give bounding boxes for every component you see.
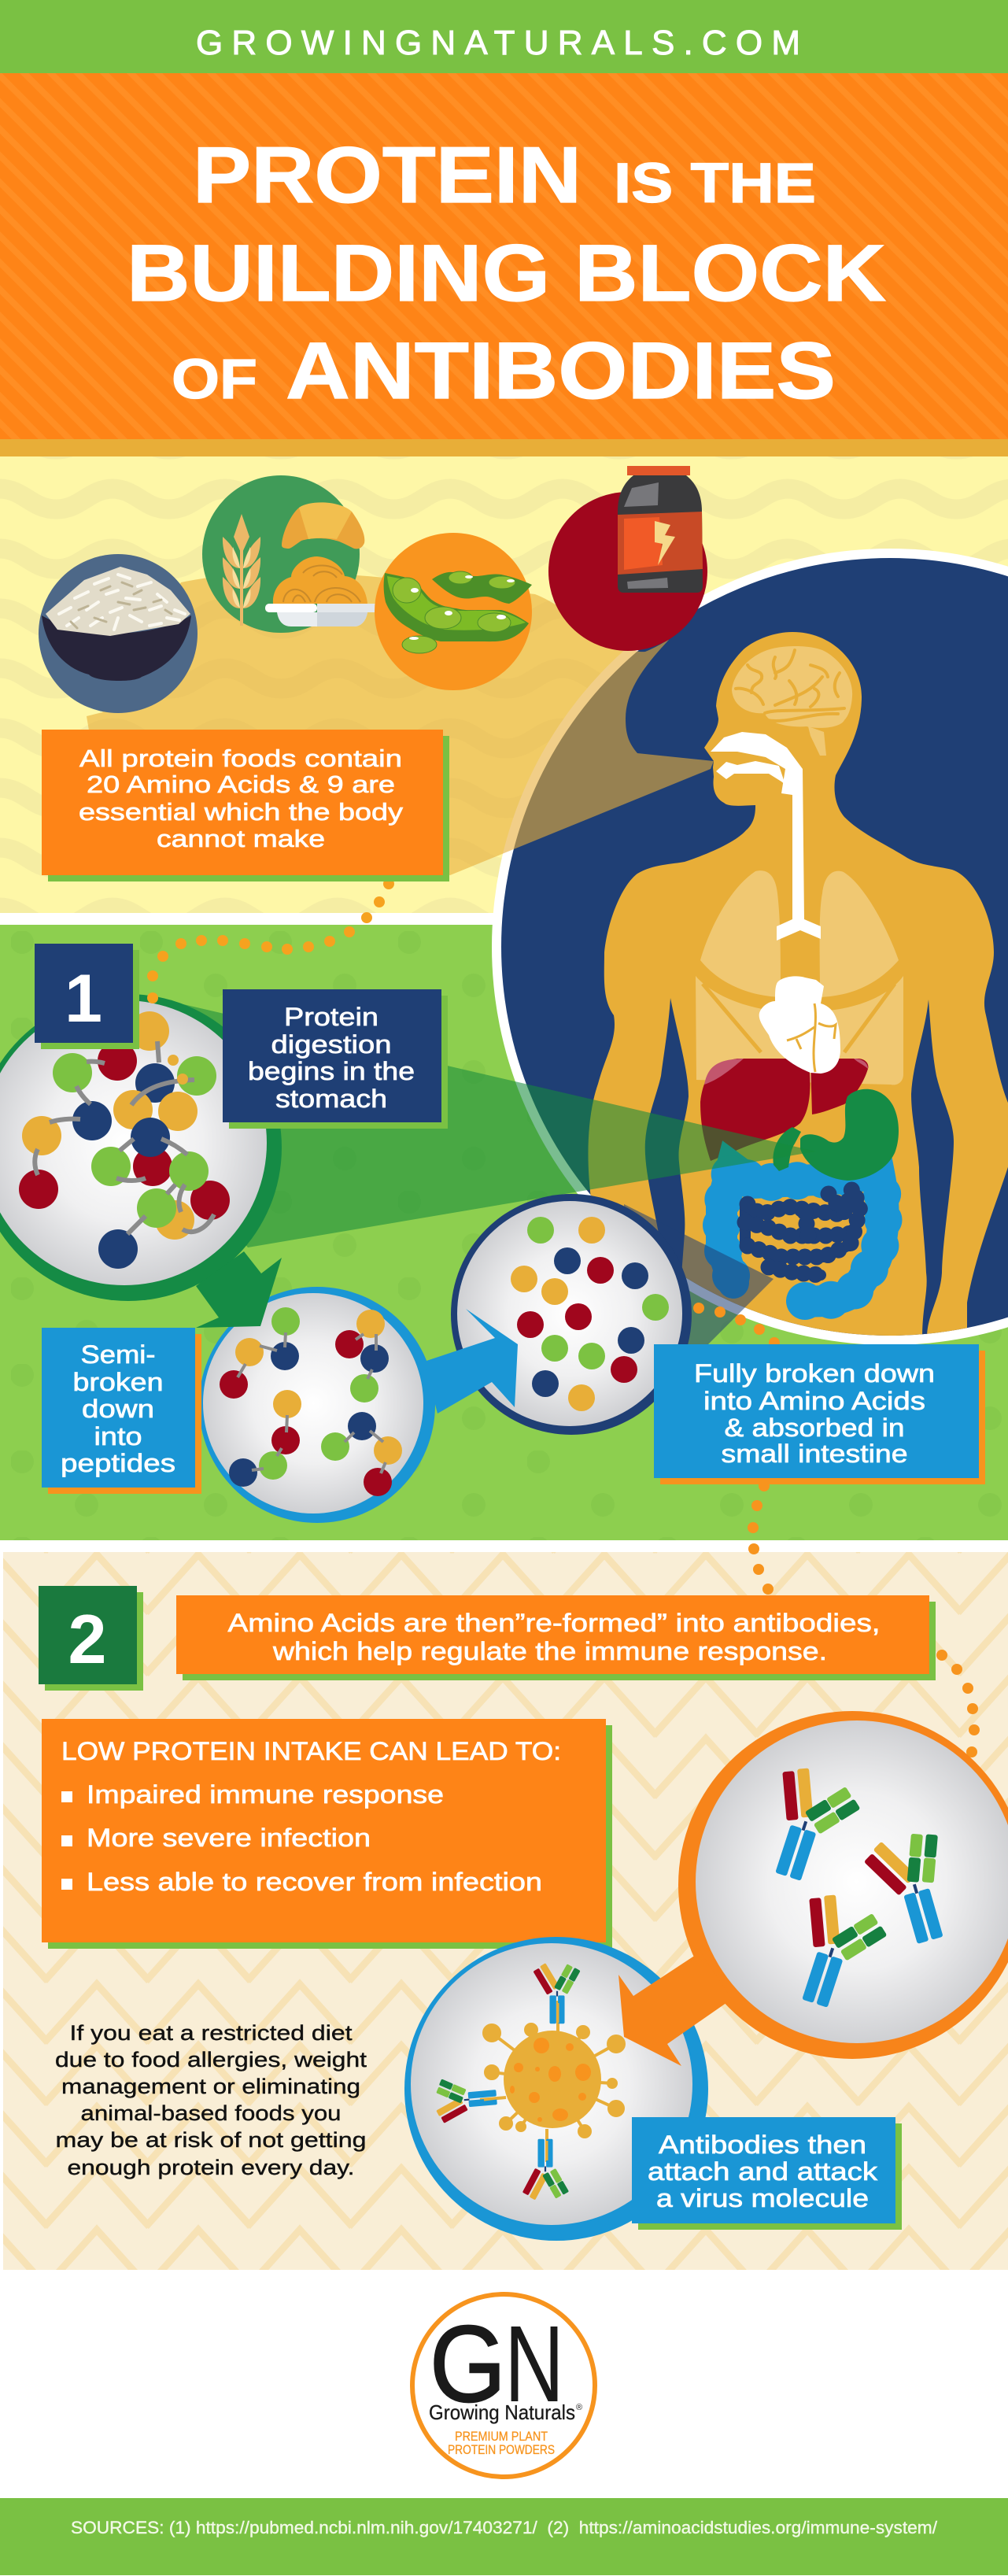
callout: semi-broken down: peptides <box>61 1449 175 1477</box>
section background: antibody panel <box>3 1552 1008 2270</box>
liver <box>700 1059 868 1161</box>
text: restricted diet note: due to food allergies, weight <box>55 2048 367 2072</box>
absorption beam: intestine to circle <box>622 1204 774 1344</box>
callout: antibodies attack <box>632 2117 902 2230</box>
callout: protein digestion: begins in the <box>248 1057 415 1085</box>
virus <box>484 2024 624 2137</box>
callout: fully broken down <box>654 1344 985 1484</box>
blue gaps between arms and torso <box>630 998 954 1338</box>
section background: digestion panel <box>0 925 1008 1540</box>
callout: protein foods: All protein foods contain <box>79 745 402 772</box>
website banner <box>0 0 1008 73</box>
attached antibodies <box>434 1963 581 2200</box>
callout: protein foods <box>42 730 449 881</box>
text: restricted diet note: management or eliminating <box>61 2075 360 2098</box>
callout: semi-broken down <box>42 1328 201 1494</box>
logo: Growing Naturals <box>412 2294 595 2477</box>
callout: protein foods: 20 Amino Acids & 9 are <box>87 771 395 798</box>
step number 1: 1 <box>65 961 102 1037</box>
brain <box>732 646 852 756</box>
food icon: rice bowl <box>39 554 198 713</box>
callout: antibodies attack: a virus molecule <box>656 2184 869 2212</box>
title panel: ANTIBODIES <box>286 326 836 416</box>
logo: Growing Naturals: G <box>430 2304 506 2425</box>
callout: semi-broken down: Semi- <box>80 1340 156 1369</box>
logo: Growing Naturals: PREMIUM PLANT <box>455 2429 548 2444</box>
callout: fully broken down: & absorbed in <box>724 1414 905 1442</box>
dotted path: intestine to antibodies <box>693 1303 980 1757</box>
title panel: PROTEIN <box>193 131 582 220</box>
logo: Growing Naturals: N <box>504 2304 564 2425</box>
circle: antibodies <box>678 1711 1008 2059</box>
callout: amino acids re-formed: which help regulate the immune response. <box>272 1637 827 1665</box>
small intestine <box>745 1188 860 1275</box>
callout: semi-broken down: into <box>94 1422 142 1451</box>
arrow: peptides to amino acids <box>424 1309 518 1414</box>
step number 2: 2 <box>68 1600 106 1678</box>
logo: Growing Naturals: Growing Naturals <box>429 2400 575 2424</box>
step number 2 <box>39 1586 143 1691</box>
heart <box>759 976 840 1074</box>
circle: peptides <box>199 1287 435 1523</box>
colon <box>722 1167 884 1301</box>
circle: amino acids <box>451 1194 692 1435</box>
panel: low protein intake: Impaired immune response <box>87 1780 444 1809</box>
text: restricted diet note: enough protein every day. <box>68 2156 354 2179</box>
arrow: whole protein to peptides <box>196 1251 282 1328</box>
lungs <box>696 870 903 1085</box>
footer band <box>0 2498 1008 2575</box>
food icon: grains and bread <box>202 475 376 633</box>
panel: low protein intake: Less able to recover from infection <box>87 1868 542 1896</box>
logo: Growing Naturals: ® <box>576 2403 582 2412</box>
callout: antibodies attack: attach and attack <box>648 2157 878 2186</box>
logo: Growing Naturals: PROTEIN POWDERS <box>448 2442 555 2457</box>
callout: antibodies attack: Antibodies then <box>659 2131 866 2159</box>
callout: protein digestion: Protein <box>284 1003 378 1031</box>
human body with organs <box>588 632 1008 1354</box>
title panel <box>0 73 1008 456</box>
callout: fully broken down: small intestine <box>721 1440 908 1468</box>
website banner: GROWINGNATURALS.COM <box>196 24 800 62</box>
callout: fully broken down: into Amino Acids <box>703 1387 925 1415</box>
circle: virus attacked by antibodies <box>404 1937 708 2241</box>
step number 1 <box>35 944 139 1049</box>
panel: low protein intake <box>42 1719 612 1949</box>
title panel: BUILDING BLOCK <box>127 228 886 318</box>
body silhouette <box>588 632 1008 1354</box>
callout: fully broken down: Fully broken down <box>694 1359 935 1388</box>
text: restricted diet note: may be at risk of not getting <box>55 2128 367 2152</box>
text: restricted diet note: If you eat a restricted diet <box>69 2021 353 2045</box>
panel: low protein intake: LOW PROTEIN INTAKE CAN LEAD TO: <box>61 1737 561 1765</box>
stomach and pancreas <box>773 1089 899 1181</box>
callout: semi-broken down: broken <box>72 1368 164 1396</box>
antibody group <box>751 1761 966 2018</box>
callout: semi-broken down: down <box>82 1395 154 1423</box>
dotted path: food box to step one <box>147 878 394 981</box>
text: restricted diet note <box>55 2021 367 2179</box>
callout: protein foods: essential which the body <box>79 798 404 826</box>
callout: amino acids re-formed: Amino Acids are then”re-formed” into antibodies, <box>228 1609 880 1637</box>
sources line: SOURCES: (1) https://pubmed.ncbi.nlm.nih.gov/17403271/ (2) https://aminoacidstudies.org/immune-system/ <box>71 2518 938 2537</box>
callout: protein foods: cannot make <box>157 825 325 852</box>
title panel: IS THE <box>614 153 816 215</box>
dot above circle one <box>147 992 158 1003</box>
digestion beam: stomach to circle <box>126 1002 816 1247</box>
food icon: protein powder jar <box>548 466 707 651</box>
text: restricted diet note: animal-based foods you <box>80 2101 342 2125</box>
arrow: antibodies to virus <box>618 1952 732 2066</box>
callout: protein digestion <box>223 989 448 1129</box>
callout: amino acids re-formed <box>176 1595 936 1680</box>
food beam to mouth <box>87 573 714 875</box>
circle: whole protein molecules <box>0 994 282 1301</box>
food icon: edamame <box>375 533 532 690</box>
callout: protein digestion: stomach <box>275 1085 387 1113</box>
large body circle backdrop <box>492 549 1008 1345</box>
section background: food panel <box>0 456 1008 913</box>
callout: protein digestion: digestion <box>271 1030 392 1059</box>
airway <box>711 732 821 941</box>
title panel: OF <box>172 349 257 411</box>
panel: low protein intake: More severe infection <box>87 1824 371 1852</box>
